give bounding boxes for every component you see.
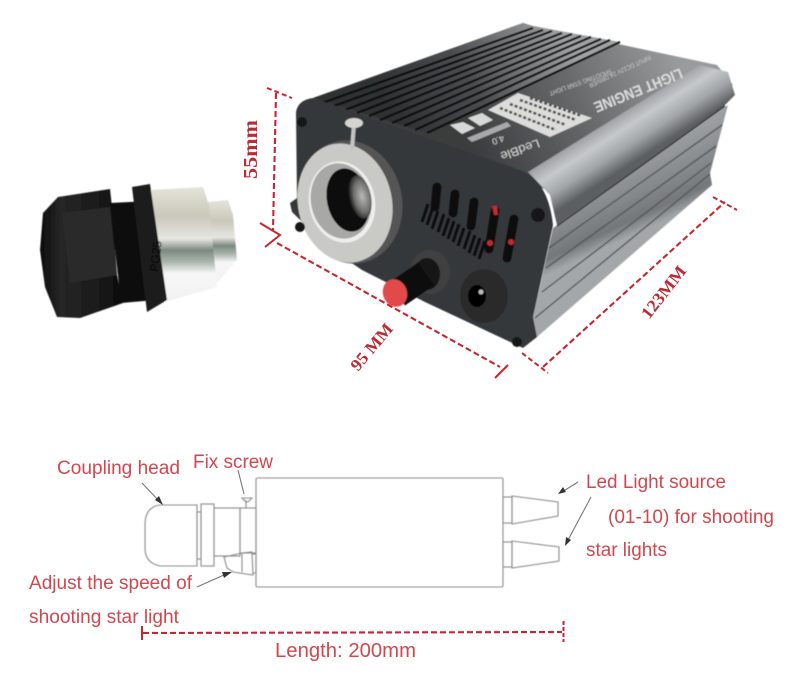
vent slots (435, 187, 514, 258)
photo: light engine housing (286, 23, 735, 348)
arrow: LED source top (558, 482, 578, 494)
dimension: 55mm (240, 88, 292, 247)
label: version: 4.0 (491, 133, 506, 147)
neck (214, 508, 240, 556)
red LED glimpses (487, 206, 514, 246)
label: LED source line 1: Led Light source (586, 472, 726, 493)
LED plug top (503, 496, 558, 524)
side face (533, 105, 728, 337)
top ribs (322, 28, 620, 133)
black nut (40, 189, 123, 318)
LED plug bottom (503, 541, 559, 568)
label: LED source line 3: star lights (586, 540, 667, 561)
label: fix screw: Fix screw (193, 452, 273, 473)
power jack (460, 269, 508, 323)
arrow: fix screw (238, 470, 244, 494)
arrow: coupling head (142, 483, 163, 505)
photo: coupling head gland (40, 184, 237, 318)
label: length 200mm: Length: 200mm (275, 640, 416, 662)
label: LIGHT ENGINE: LIGHT ENGINE (591, 64, 685, 115)
small print line 2: INPUT DC12V 2A DRIVER (587, 53, 652, 88)
dimension: 123MM (522, 197, 737, 373)
silver barrel (150, 187, 217, 302)
ribbed area (313, 23, 620, 133)
speed knob (224, 552, 256, 575)
nut ribs (62, 207, 117, 283)
dimension: overall length (142, 621, 564, 642)
speed knob (379, 250, 450, 310)
arrow: adjust speed (197, 572, 232, 587)
spring (422, 204, 485, 259)
optical ring (286, 131, 414, 273)
flange (197, 504, 214, 566)
dimension: 123MM: 123MM (637, 262, 690, 322)
dimension: 55mm: 55mm (240, 120, 262, 179)
top face (313, 23, 733, 190)
small icons (450, 113, 511, 142)
coupling head outline (145, 505, 197, 566)
silver tip (208, 200, 237, 283)
flange with PG25: PG25 (147, 240, 165, 272)
label: LedBle: LedBle (498, 136, 542, 163)
flange with PG25 (132, 184, 167, 312)
dimension: 95 MM: 95 MM (347, 319, 397, 375)
fix screw (345, 118, 363, 150)
label: adjust speed: Adjust the speed of (29, 573, 193, 594)
label: LED source line 2: (01-10) for shooting (608, 507, 774, 528)
main box (256, 478, 503, 587)
line diagram: light engine side view (145, 478, 559, 587)
chamfer highlight band (528, 65, 735, 225)
fix screw (242, 498, 252, 508)
QR pattern (500, 98, 582, 130)
arrow: LED source bottom (565, 497, 591, 546)
side grooves (535, 125, 722, 318)
label: shooting star light: shooting star light (29, 607, 180, 628)
small print line 1: SHOOTING STAR LIGHT (548, 67, 613, 96)
thread (110, 201, 156, 303)
dimension: 95 MM (277, 243, 508, 378)
front face (290, 98, 553, 348)
label: coupling head: Coupling head (57, 458, 180, 479)
QR label (488, 93, 592, 137)
panel screws (295, 117, 545, 347)
